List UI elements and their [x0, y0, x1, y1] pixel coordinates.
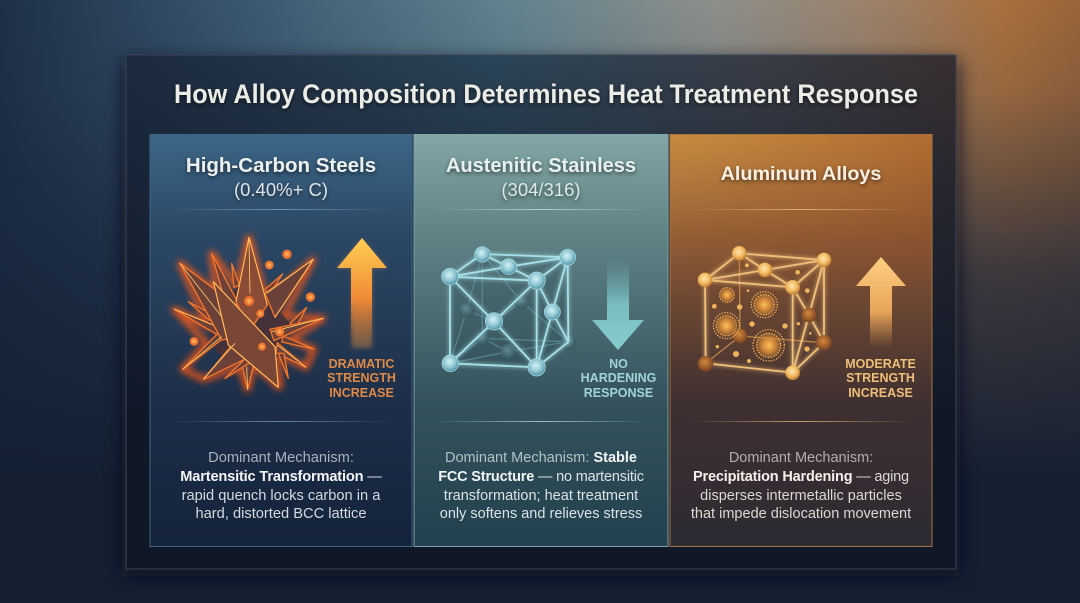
panel: aluminum alloys: [670, 134, 932, 546]
text: mechanism: Dominant Mechanism: Stable: [445, 450, 637, 466]
panel: high-carbon steels: [150, 134, 412, 546]
text: mechanism: FCC Structure — no martensitic: [438, 469, 644, 485]
label: moderate strength increase: STRENGTH: [846, 371, 915, 385]
text: mechanism: that impede dislocation movement: [691, 506, 912, 522]
label: no hardening response: RESPONSE: [584, 386, 653, 400]
panel: austenitic stainless: [414, 134, 668, 546]
label: dramatic strength increase: DRAMATIC: [329, 357, 394, 371]
text: mechanism: Dominant Mechanism:: [729, 450, 873, 466]
text: mechanism: rapid quench locks carbon in a: [182, 487, 381, 504]
icon: precipitate lattice: [698, 246, 832, 380]
label: moderate strength increase: MODERATE: [845, 357, 916, 371]
heading: high-carbon steels: High-Carbon Steels: [186, 154, 376, 177]
label: moderate strength increase: INCREASE: [848, 386, 913, 400]
arrow: down teal: [592, 258, 644, 350]
icon: martensite star: [174, 237, 323, 389]
main frame panel: [122, 55, 960, 576]
heading: high-carbon steels: (0.40%+ C): [234, 179, 328, 200]
text: mechanism: Dominant Mechanism:: [208, 449, 354, 466]
heading: austenitic stainless: (304/316): [501, 179, 581, 200]
heading: aluminum alloys: Aluminum Alloys: [721, 163, 881, 185]
heading: austenitic stainless: Austenitic Stainless: [446, 155, 636, 177]
icon: fcc lattice: [442, 247, 576, 376]
arrow: up orange: [337, 238, 387, 348]
text: mechanism: disperses intermetallic particles: [700, 488, 902, 504]
text: mechanism: hard, distorted BCC lattice: [195, 505, 367, 522]
arrow: up tan: [856, 257, 906, 348]
label: dramatic strength increase: STRENGTH: [327, 371, 396, 385]
text: mechanism: Precipitation Hardening — aging: [693, 469, 909, 485]
precipitate clusters: [712, 263, 812, 363]
text: mechanism: only softens and relieves stress: [440, 506, 642, 522]
title: How Alloy Composition Determines Heat Treatment Response: [174, 79, 918, 109]
text: mechanism: transformation; heat treatment: [444, 488, 639, 504]
martensite particles: [190, 250, 315, 350]
label: no hardening response: HARDENING: [581, 371, 656, 385]
label: no hardening response: NO: [609, 357, 628, 371]
text: mechanism: Martensitic Transformation —: [180, 468, 382, 485]
label: dramatic strength increase: INCREASE: [329, 386, 394, 400]
